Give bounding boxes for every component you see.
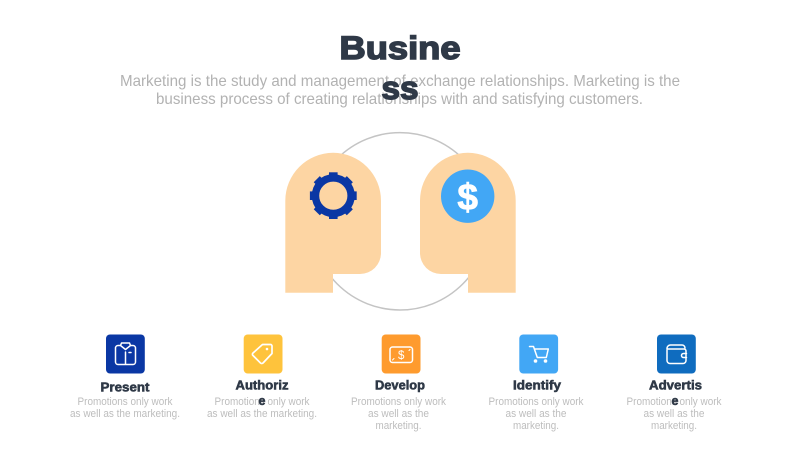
icon: dollar coin [441, 170, 494, 223]
title: ss [382, 70, 418, 106]
icon: dollar coin: $ [457, 176, 478, 218]
heading: Advertis [649, 378, 702, 392]
item: Authorize [207, 334, 317, 420]
heading: Develop [375, 378, 425, 392]
heading: Authoriz [236, 378, 288, 392]
icon: gear [310, 172, 357, 219]
description: marketing. [513, 420, 559, 432]
description: Promotions only work [488, 396, 584, 408]
description: as well as the [506, 408, 566, 420]
description [207, 396, 317, 420]
description: Promotions only work [351, 396, 446, 408]
description: Promotions only work [214, 396, 310, 408]
heading: e [672, 394, 679, 408]
icon: shirt [106, 334, 145, 374]
item: Identify [488, 334, 584, 432]
item: Advertise [626, 334, 722, 432]
description: as well as the marketing. [70, 408, 180, 420]
icon: wallet [657, 334, 696, 374]
icon: cart [519, 334, 558, 374]
heading [649, 378, 702, 408]
heading [236, 378, 288, 408]
icon: tag [244, 334, 282, 374]
description: as well as the marketing. [207, 408, 317, 420]
description [70, 396, 180, 420]
description: as well as the [644, 408, 704, 420]
heading: Present [100, 380, 150, 394]
icon: banknote: $ [398, 350, 405, 362]
title: Busine [340, 30, 460, 66]
description [351, 396, 446, 432]
subtitle: Marketing is the study and management of exchange relationships. Marketing is the [120, 73, 680, 90]
description: marketing. [651, 420, 697, 432]
subtitle [120, 73, 680, 108]
circle ring [311, 133, 489, 310]
description: marketing. [376, 420, 422, 432]
title [340, 30, 460, 106]
item: Present [70, 334, 180, 420]
right head [420, 153, 516, 293]
item: Develop [351, 334, 446, 432]
heading: Identify [513, 378, 561, 392]
description: Promotions only work [626, 396, 722, 408]
subtitle: business process of creating relationships with and satisfying customers. [156, 91, 643, 108]
description [488, 396, 584, 432]
description [626, 396, 722, 432]
left head [285, 153, 381, 293]
description: Promotions only work [78, 396, 173, 408]
heading: e [259, 394, 266, 408]
description: as well as the [368, 408, 429, 420]
